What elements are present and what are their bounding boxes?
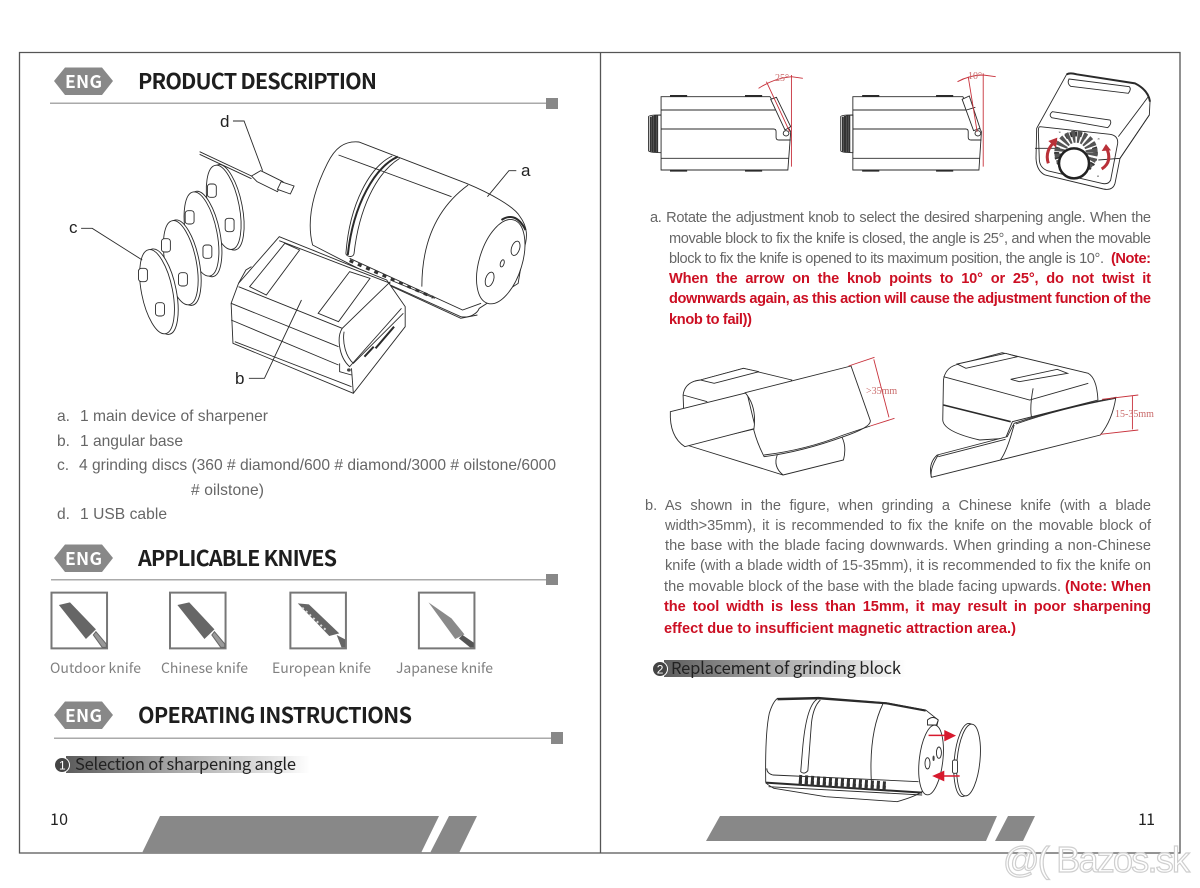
heading: operating instructions: ENG xyxy=(65,703,102,728)
knife icons row xyxy=(50,593,493,678)
panel: right page xyxy=(645,71,1155,841)
diagram: 10 degree side view xyxy=(841,73,996,171)
paragraph b: the movable block of the base with the blade facing upwards. xyxy=(664,579,1061,595)
heading: operating instructions: OPERATING INSTRUCTIONS xyxy=(138,699,412,730)
angle diagrams xyxy=(649,73,1150,189)
paragraph b: knife (with a blade width of 15-35mm), it is recommended to fix the knife on xyxy=(665,558,1151,574)
paragraph b: b. As shown in the figure, when grinding a Chinese knife (with a blade xyxy=(645,498,1151,514)
parts list xyxy=(57,408,556,523)
paragraph a: When the arrow on the knob points to 10° or 25°, do not twist it xyxy=(669,271,1151,287)
heading: applicable knives xyxy=(51,542,558,585)
diagram: knob perspective: 25 xyxy=(1097,176,1099,178)
detached disc xyxy=(951,723,983,797)
blade width labels: 15-35mm xyxy=(1115,409,1154,420)
diagram: chinese knife width xyxy=(670,357,894,475)
parts list: a. xyxy=(57,408,70,425)
paragraph a: knob to fail)) xyxy=(669,312,752,328)
blade width labels xyxy=(866,386,1154,420)
parts list: 4 grinding discs (360 # diamond/600 # diamond/3000 # oilstone/6000 xyxy=(79,457,556,474)
label d: d xyxy=(220,112,229,131)
angle labels xyxy=(775,71,982,84)
knife labels: European knife xyxy=(272,658,371,678)
angle labels: 10° xyxy=(968,71,982,82)
icon: european knife xyxy=(290,593,346,648)
watermark: @( Bazos.sk xyxy=(1003,839,1191,880)
footer bars right xyxy=(706,816,1035,841)
callout lines xyxy=(81,121,516,378)
diagram: knob perspective: 25 xyxy=(1098,139,1100,141)
page number 11: 11 xyxy=(1138,806,1155,830)
paragraph a: a. Rotate the adjustment knob to select the desired sharpening angle. When the xyxy=(650,210,1151,226)
paragraph b: width>35mm), it is recommended to fix the knife on the movable block of xyxy=(664,518,1152,534)
paragraph b: the tool width is less than 15mm, it may result in poor sharpening xyxy=(664,599,1151,615)
blade width labels: >35mm xyxy=(866,386,897,397)
knife labels: Japanese knife xyxy=(396,658,493,678)
heading: product description: ENG xyxy=(65,69,102,94)
icon: grinding discs xyxy=(133,162,250,337)
heading: operating instructions xyxy=(54,699,563,744)
paragraph b: effect due to insufficient magnetic attraction area.) xyxy=(664,621,1016,637)
knife labels xyxy=(50,658,493,678)
diagram: knob perspective: 10 xyxy=(1059,169,1061,171)
label c: c xyxy=(69,218,78,237)
parts list: c. xyxy=(57,457,69,474)
diagram: knob perspective xyxy=(1035,73,1150,189)
paragraph b: the base with the blade facing downwards. When grinding a non-Chinese xyxy=(665,538,1151,554)
paragraph a: movable block to fix the knife is closed, the angle is 25°, and when the movable xyxy=(669,231,1151,247)
icon: main device xyxy=(310,142,534,318)
blade width diagrams xyxy=(670,353,1138,477)
knife labels: Chinese knife xyxy=(161,658,248,678)
subheading: replacement of grinding block: Replacement of grinding block xyxy=(671,655,901,679)
paragraph a: (Note: xyxy=(1111,251,1151,267)
subheading: selection of sharpening angle: Selection of sharpening angle xyxy=(75,751,296,775)
subheading: replacement of grinding block: 2 xyxy=(657,662,664,676)
label a: a xyxy=(521,161,531,180)
footer bars left xyxy=(142,816,477,853)
heading: applicable knives: APPLICABLE KNIVES xyxy=(137,542,337,573)
panel: left page xyxy=(50,65,563,853)
paragraph b xyxy=(645,498,1152,637)
paragraph b: (Note: When xyxy=(1065,579,1151,595)
icon: usb cable xyxy=(200,152,294,194)
icon: outdoor knife xyxy=(51,593,107,648)
device body xyxy=(766,697,947,802)
heading: product description xyxy=(50,65,558,109)
angle labels: 25° xyxy=(775,73,789,84)
red arrows xyxy=(929,730,960,781)
side views xyxy=(649,73,996,171)
parts list: b. xyxy=(57,433,70,450)
illustration: parts xyxy=(81,121,534,393)
parts list: 1 USB cable xyxy=(80,506,167,523)
parts list: # oilstone) xyxy=(191,482,264,499)
parts list: 1 main device of sharpener xyxy=(80,408,268,425)
diagram: knob perspective: 10 xyxy=(1059,132,1061,134)
diagram: grinding block replacement xyxy=(766,697,983,802)
knife labels: Outdoor knife xyxy=(50,658,141,678)
paragraph a: block to fix the knife is opened to its maximum position, the angle is 10°. xyxy=(669,251,1104,267)
page number 10: 10 xyxy=(50,806,68,830)
product exploded diagram xyxy=(69,112,534,393)
paragraph a: downwards again, as this action will cause the adjustment function of the xyxy=(669,291,1151,307)
heading: product description: PRODUCT DESCRIPTION xyxy=(138,65,377,96)
icon: chinese knife xyxy=(170,593,226,648)
diagram: 25 degree side view xyxy=(649,75,803,171)
heading: applicable knives: ENG xyxy=(65,546,102,571)
parts list: d. xyxy=(57,506,70,523)
parts list: 1 angular base xyxy=(80,433,183,450)
paragraph a xyxy=(650,210,1151,328)
icon: japanese knife xyxy=(419,593,474,648)
label b: b xyxy=(235,369,244,388)
diagram: non-chinese knife width xyxy=(930,353,1138,477)
icon: angular base xyxy=(231,237,405,393)
subheading: selection of sharpening angle: 1 xyxy=(59,758,66,772)
